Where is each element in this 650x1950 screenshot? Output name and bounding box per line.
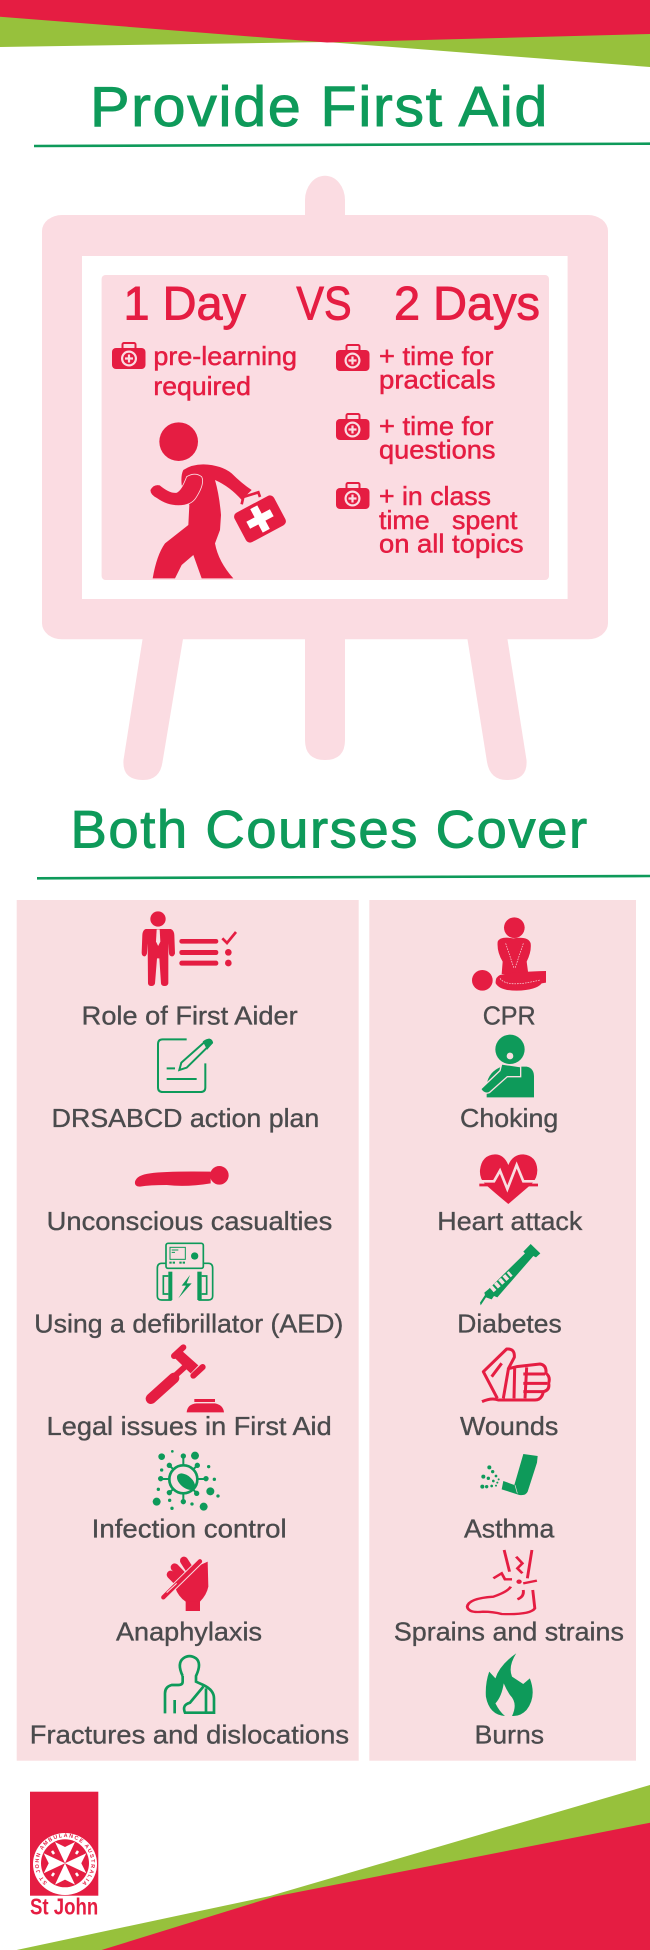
two days point: time for questions xyxy=(336,411,496,464)
logo: st john xyxy=(30,1792,98,1919)
two days point: in class time spent on all topics: + in class xyxy=(379,481,491,511)
topic: unconscious casualties xyxy=(47,1166,332,1236)
two days point: in class time spent on all topics xyxy=(336,481,524,558)
topic: legal issues: Legal issues in First Aid xyxy=(47,1411,332,1441)
panel: easel comparison board xyxy=(42,176,608,780)
topic: cpr: CPR xyxy=(483,1000,536,1030)
topic: unconscious casualties: Unconscious casualties xyxy=(47,1206,332,1236)
heading: both courses cover: Both Courses Cover xyxy=(70,800,589,859)
icon: injured foot xyxy=(467,1550,537,1614)
comparison headings: VS xyxy=(296,276,352,329)
topic: infection control: Infection control xyxy=(92,1514,287,1544)
icon: gavel xyxy=(151,1347,224,1412)
two days point: in class time spent on all topics: on all topics xyxy=(379,528,524,558)
topic: asthma: Asthma xyxy=(464,1514,555,1544)
topic: sprains and strains: Sprains and strains xyxy=(394,1617,624,1647)
icon: flame xyxy=(486,1653,533,1716)
topic: diabetes xyxy=(457,1244,562,1339)
topic: choking: Choking xyxy=(460,1103,558,1133)
topic: heart attack xyxy=(437,1154,583,1236)
topic: sprains and strains xyxy=(394,1550,624,1647)
topic: heart attack: Heart attack xyxy=(437,1206,583,1236)
icon: person with arm sling xyxy=(165,1656,214,1713)
topic: choking xyxy=(460,1035,558,1133)
panel: left topic column xyxy=(17,900,359,1761)
two days point: in class time spent on all topics: time spent xyxy=(379,505,518,535)
icon: bandaged hand xyxy=(482,1349,549,1402)
topic: cpr xyxy=(472,917,546,1030)
topic: wounds xyxy=(460,1349,558,1441)
topic: asthma xyxy=(464,1454,555,1544)
icon: cpr on casualty xyxy=(472,917,546,991)
icon: fist holding auto-injector xyxy=(163,1561,208,1611)
easel stand xyxy=(42,176,608,780)
icon: notepad and pen xyxy=(158,1039,212,1092)
one day point: pre-learning xyxy=(112,341,297,401)
comparison headings xyxy=(124,276,540,329)
bottom banner xyxy=(17,1785,650,1950)
icon: person with checklist xyxy=(142,911,236,986)
icon: insulin pen xyxy=(480,1244,540,1305)
topic: drsabcd action plan xyxy=(52,1039,319,1133)
two days point: time for questions: questions xyxy=(379,434,496,464)
topic: diabetes: Diabetes xyxy=(457,1309,562,1339)
comparison headings: 1 Day xyxy=(124,276,246,329)
icon: defibrillator xyxy=(157,1243,213,1300)
topic: fractures and dislocations: Fractures and dislocations xyxy=(30,1719,349,1749)
topic: drsabcd action plan: DRSABCD action plan xyxy=(52,1103,319,1133)
topic: anaphylaxis: Anaphylaxis xyxy=(116,1617,262,1647)
topic: legal issues xyxy=(47,1347,332,1441)
two days point: time for questions: + time for xyxy=(379,411,494,441)
title: Provide First Aid xyxy=(90,75,549,139)
logo: st john: ST JOHN AMBULANCE AUSTRALIA xyxy=(35,1833,95,1885)
topic: using a defibrillator: Using a defibrillator (AED) xyxy=(34,1309,343,1339)
topic: fractures and dislocations xyxy=(30,1656,349,1749)
icon: person carrying first aid kit xyxy=(150,422,288,578)
top banner xyxy=(0,0,650,67)
topic: role of first aider xyxy=(82,911,298,1030)
logo: st john: St John xyxy=(30,1893,98,1919)
topic: role of first aider: Role of First Aider xyxy=(82,1000,298,1030)
topic: wounds: Wounds xyxy=(460,1411,558,1441)
icon: heart with pulse xyxy=(477,1154,542,1204)
panel: right topic column xyxy=(369,900,636,1761)
topic: burns xyxy=(475,1653,544,1750)
two days point: time for practicals: + time for xyxy=(379,341,494,371)
topic: using a defibrillator xyxy=(34,1243,343,1339)
icon: inhaler xyxy=(480,1454,538,1495)
two days point: time for practicals: practicals xyxy=(379,364,496,394)
two days point: time for practicals xyxy=(336,341,496,394)
one day point: pre-learning: required xyxy=(153,371,251,401)
one day point: pre-learning: pre-learning xyxy=(153,341,297,371)
topic: infection control xyxy=(92,1450,287,1544)
topic: burns: Burns xyxy=(475,1720,544,1750)
topic: anaphylaxis xyxy=(116,1561,262,1647)
icon: virus xyxy=(153,1450,220,1511)
comparison headings: 2 Days xyxy=(394,276,540,329)
icon: person lying down xyxy=(135,1166,229,1187)
icon: person choking xyxy=(481,1035,534,1097)
